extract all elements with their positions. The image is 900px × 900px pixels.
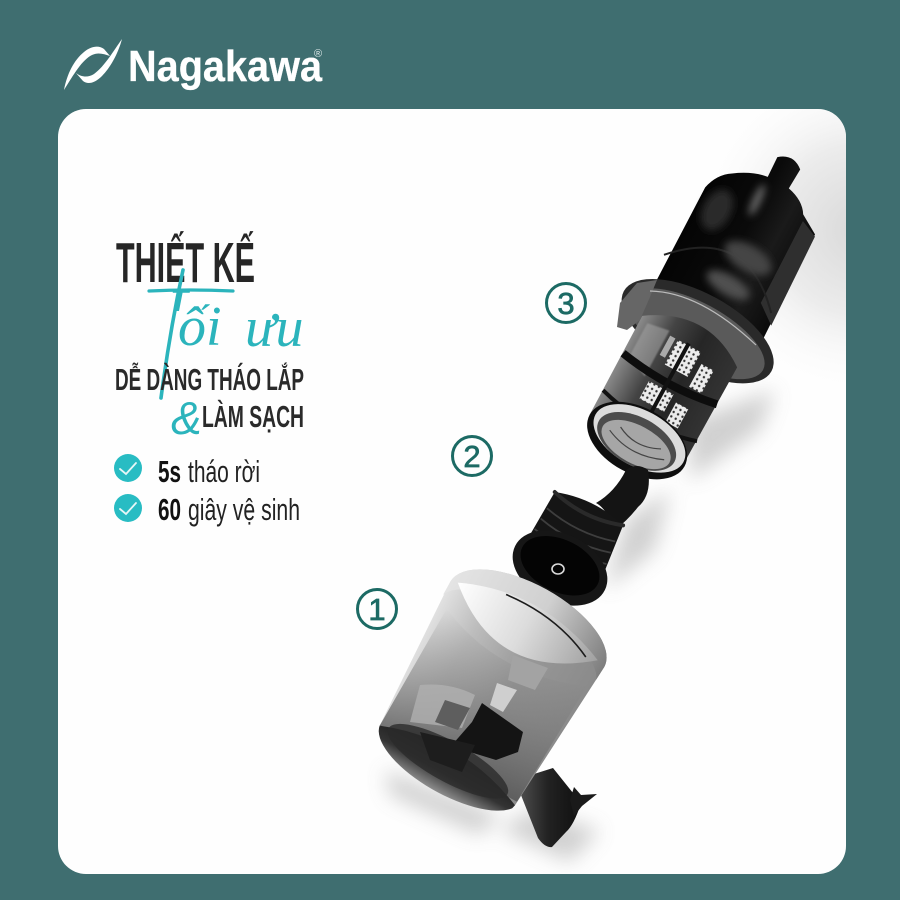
bullet: 5s tháo rời: tháo rời [188, 454, 260, 489]
inner parts [410, 655, 548, 772]
bowl body [359, 547, 624, 832]
subheading: LÀM SẠCH: LÀM SẠCH [202, 399, 304, 434]
flange highlight [650, 291, 756, 345]
bullet: 60 giây vệ sinh [114, 492, 300, 527]
panel: white product card [58, 109, 846, 874]
bullet: 60 giây vệ sinh: 60 [158, 492, 181, 527]
juicer part 3: strainer and auger [548, 127, 846, 510]
mesh windows [665, 340, 701, 377]
heading: THIẾT KẾ: THIẾT KẾ [116, 230, 255, 295]
gloss highlights [694, 183, 777, 306]
number marker 1 [358, 590, 396, 628]
bullet: 5s tháo rời [114, 454, 260, 489]
number marker 3: 3 [557, 286, 575, 321]
subheading: DỄ DÀNG THÁO LẮP: DỄ DÀNG THÁO LẮP [115, 361, 304, 397]
number marker 2: 2 [463, 439, 481, 474]
base disc [500, 516, 620, 620]
bullet: 5s tháo rời: 5s [158, 454, 181, 489]
spiral blade [596, 466, 649, 530]
logo: Nagakawa [64, 39, 322, 91]
lower ring [574, 386, 700, 495]
juicer part 2: auger screw [500, 466, 649, 620]
flange left lug [617, 280, 657, 330]
rim band [443, 547, 624, 680]
bullet list [114, 454, 300, 527]
script heading: Tối ưu: ối [178, 296, 222, 358]
black top cylinder [642, 127, 846, 356]
flange and clear strainer basket [548, 258, 790, 510]
flange [606, 258, 790, 405]
bowl opening [441, 567, 606, 690]
juicer part 1: juice bowl [358, 547, 624, 847]
threaded body [527, 485, 629, 577]
base [365, 713, 524, 828]
script heading: Tối ưu [149, 270, 304, 398]
headline text block [115, 230, 304, 444]
script heading: Tối ưu: T [170, 285, 191, 318]
spout [515, 768, 597, 847]
number marker 2 [452, 436, 492, 476]
lower wash [380, 608, 587, 804]
center hole [552, 564, 564, 574]
product drop shadows [385, 390, 775, 862]
bullet: 60 giây vệ sinh: giây vệ sinh [188, 492, 300, 527]
number marker 1: 1 [368, 592, 386, 627]
registered mark: ® [314, 48, 322, 60]
basket [589, 299, 746, 466]
number marker 3 [546, 284, 586, 322]
rim line [498, 593, 594, 657]
script ampersand: & [171, 392, 202, 444]
logo wordmark: Nagakawa [128, 42, 322, 91]
icon: logo swoosh [64, 39, 122, 90]
script heading: Tối ưu: ưu [245, 297, 304, 359]
